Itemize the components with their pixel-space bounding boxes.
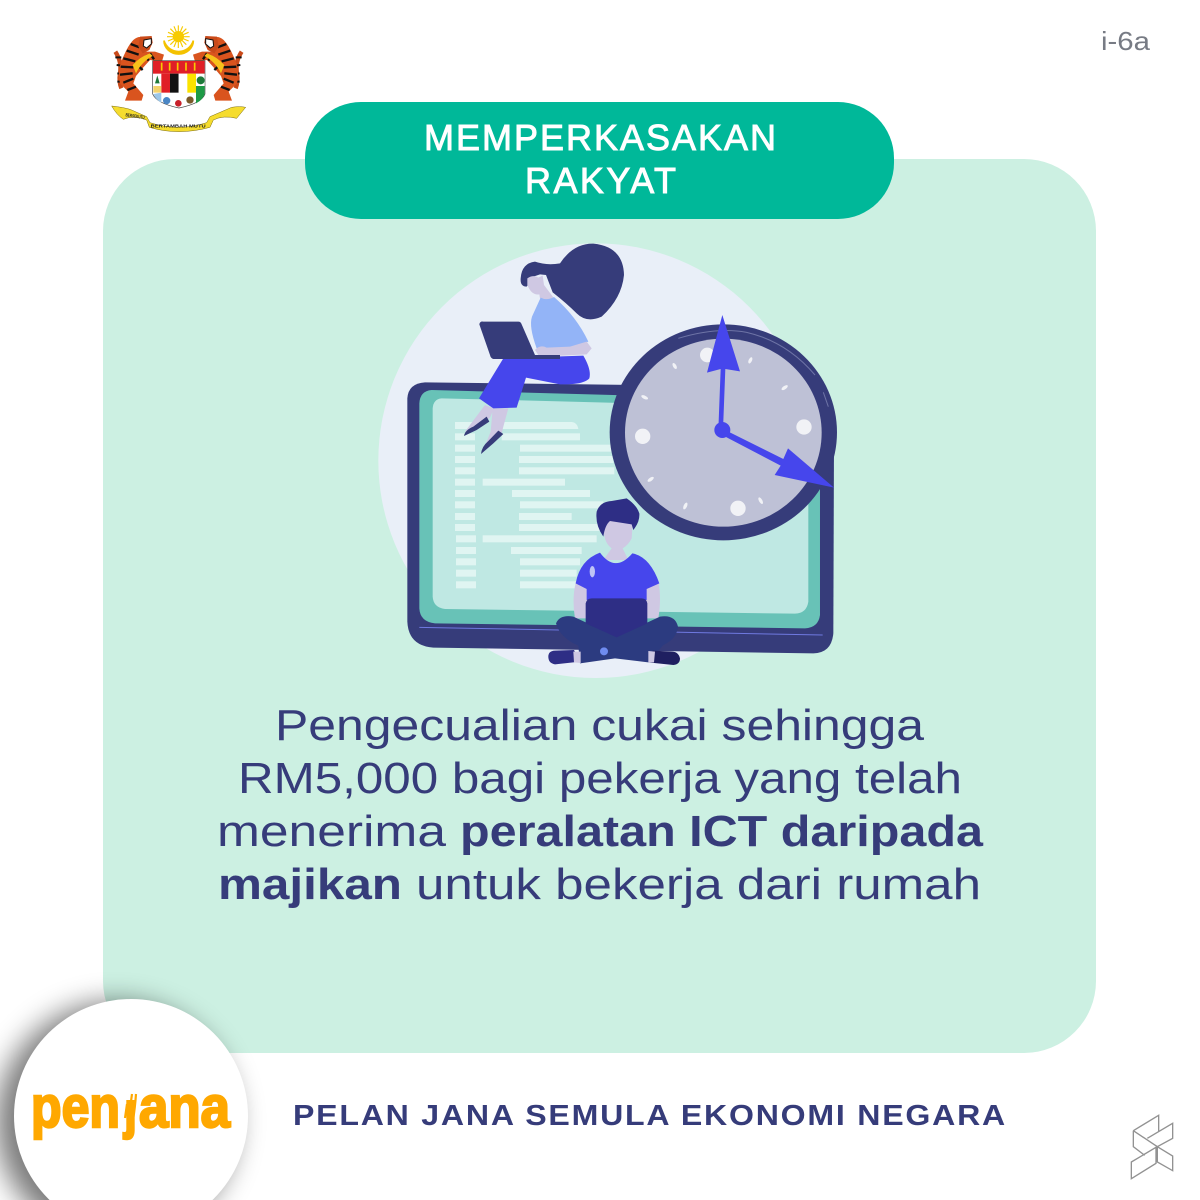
penjana wordmark: ana [139,1075,231,1140]
body text: Pengecualian cukai sehingga [275,701,925,750]
penjana wordmark: j [123,1075,137,1140]
heading pill [305,102,894,219]
body text: menerima [217,807,447,856]
body text [217,701,984,909]
penjana wordmark: pen [31,1075,120,1140]
penjana wordmark [31,1075,231,1140]
motto ribbon [112,106,246,132]
laptop [479,322,560,359]
arms [574,582,660,618]
legs [465,405,508,452]
clock hands [707,315,834,488]
motto ribbon: BERSEKUTU [125,112,145,120]
neck and face [603,520,633,560]
icon: national coat of arms [112,25,246,132]
clock markers [635,348,812,516]
body text: majikan [218,860,402,909]
shield [153,61,205,108]
backdrop circle [378,243,813,678]
pants [479,356,590,408]
crossed legs [556,616,678,663]
code lines [455,422,614,588]
icon: corner monogram [1131,1115,1173,1179]
hair [596,498,639,537]
laptop back [586,598,647,637]
right tiger [193,36,242,101]
body text: peralatan ICT daripada [460,807,984,856]
motto ribbon: BERTAMBAH MUTU [151,124,206,129]
woman with laptop [464,244,624,454]
body text: RM5,000 bagi pekerja yang telah [238,754,962,803]
illustration: remote work [378,243,837,678]
man with laptop [548,498,680,665]
heading text: MEMPERKASAKAN [424,117,776,158]
arm [535,342,592,356]
footer title: PELAN JANA SEMULA EKONOMI NEGARA [293,1100,1007,1132]
panel: main mint card [103,159,1096,1053]
face [527,276,553,301]
body text: untuk bekerja dari rumah [416,860,981,909]
sun and crescent [164,25,193,54]
heading text: RAKYAT [525,160,676,201]
hair [521,244,624,319]
clock [610,315,837,540]
penjana logo badge [0,999,248,1200]
shoes [548,650,580,664]
left tiger [115,36,164,101]
heading text [424,117,776,201]
page code: i-6a [1101,26,1151,56]
top [531,297,588,348]
monitor [407,382,834,653]
wheat stalk on the j [120,1080,138,1120]
tee [576,553,659,600]
